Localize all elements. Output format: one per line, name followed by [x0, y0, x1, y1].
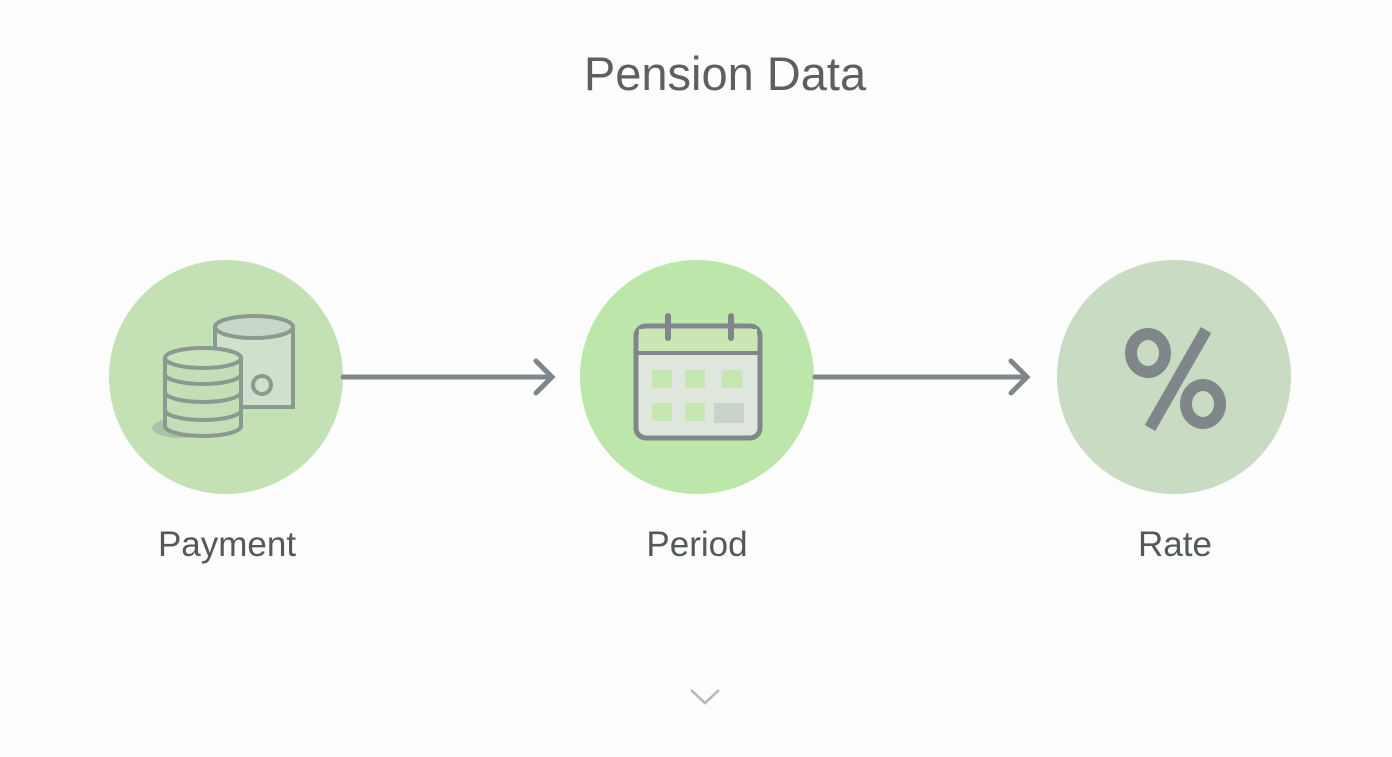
panel: payment	[109, 260, 343, 494]
arrow: payment to period	[343, 361, 552, 393]
icon: chevron down	[691, 690, 719, 703]
panel: rate	[1057, 260, 1291, 494]
icon: coins	[152, 316, 293, 438]
panel: period	[580, 260, 814, 494]
icon: calendar	[636, 316, 760, 438]
title: Pension Data	[584, 47, 867, 100]
icon: percent	[1131, 330, 1220, 428]
label: period: Period	[646, 525, 748, 564]
label: rate: Rate	[1138, 525, 1212, 564]
arrow: period to rate	[815, 361, 1027, 393]
label: payment: Payment	[158, 525, 296, 564]
